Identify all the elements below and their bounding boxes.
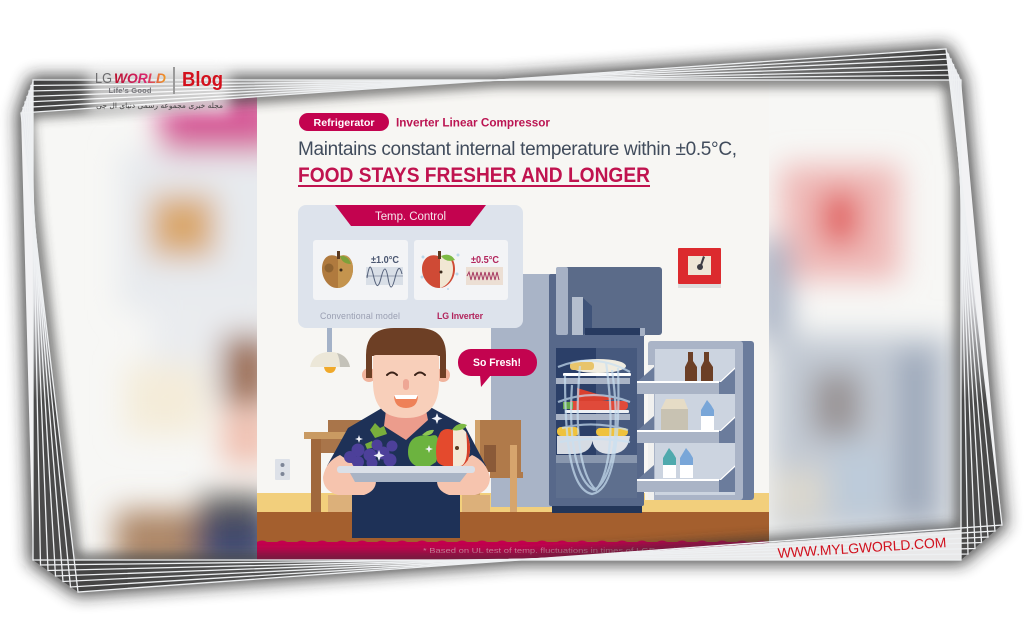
inner shadow around photo <box>25 80 961 560</box>
hair <box>366 328 446 378</box>
freezer door <box>556 267 662 336</box>
neck <box>384 410 428 440</box>
clock <box>678 248 721 288</box>
ears <box>362 368 450 382</box>
fridge <box>491 267 754 513</box>
caption: inverter: LG Inverter <box>437 311 484 321</box>
nose <box>403 379 409 390</box>
card: conventional <box>313 240 408 300</box>
grapes <box>344 423 398 468</box>
heading line one: Maintains constant internal temperature within ±0.5°C, <box>298 139 737 160</box>
red apple <box>436 424 470 467</box>
wall outlet <box>275 459 290 480</box>
shirt <box>327 408 486 538</box>
tag: Refrigerator: Refrigerator <box>314 117 374 129</box>
tagline: Life's Good <box>108 86 152 95</box>
hands <box>323 455 490 495</box>
subheading: Inverter Linear Compressor <box>396 116 550 130</box>
icon: spoiled apple <box>322 251 353 288</box>
banner: Temp. Control <box>375 211 446 223</box>
blue bottle <box>701 400 714 430</box>
heading line two: FOOD STAYS FRESHER AND LONGER <box>298 164 650 187</box>
logo backdrop haze <box>88 64 230 114</box>
speech bubble: So Fresh! <box>473 357 521 369</box>
speech bubble <box>458 349 537 387</box>
blurred photo area <box>94 97 958 560</box>
LG mark: LG <box>95 71 112 87</box>
fridge front <box>549 274 644 506</box>
food: plate <box>563 359 631 376</box>
chair <box>462 420 523 512</box>
baseboard and floor <box>257 493 769 560</box>
tag: Refrigerator <box>299 113 389 131</box>
green apple <box>408 430 439 466</box>
lamp <box>310 328 350 373</box>
bottles <box>685 352 713 381</box>
banner <box>335 205 486 226</box>
footnote: * Based on UL test of temp. fluctuations in times of LGE models RA06/C & RA06/C <box>423 546 769 555</box>
teal bottle <box>663 448 676 478</box>
icon: fresh apple <box>420 251 460 290</box>
compressed wave chart <box>466 267 503 285</box>
fridge door <box>637 341 754 500</box>
boy <box>323 328 490 538</box>
food: watermelon <box>563 388 629 413</box>
panel: main infographic <box>257 70 769 560</box>
card: inverter <box>414 240 508 300</box>
blurred right side <box>755 165 955 535</box>
wall <box>257 70 769 495</box>
WORLD wordmark: WORLD <box>114 71 166 86</box>
blue bottle two <box>680 448 693 478</box>
face <box>373 355 439 418</box>
tray <box>350 473 467 482</box>
fridge side <box>491 274 552 507</box>
tray rim <box>337 466 475 473</box>
table <box>304 420 378 512</box>
food: bowls <box>557 427 630 454</box>
fridge interior <box>556 348 637 463</box>
milk carton <box>661 399 688 431</box>
caption: conventional: Conventional model <box>320 311 400 321</box>
logo: LG World Blog <box>88 64 230 114</box>
value: ±0.5°C <box>471 254 499 266</box>
mouth <box>394 395 418 408</box>
Blog: Blog <box>182 69 223 91</box>
persian tagline: مجله خبری مجموعه رسمی دنیای ال جی <box>96 101 223 110</box>
website url: WWW.MYLGWORLD.COM <box>777 534 947 561</box>
blurred left side <box>115 90 290 570</box>
wave chart <box>366 267 403 287</box>
door shelves <box>637 367 735 492</box>
fridge base <box>552 506 642 513</box>
divider <box>173 67 175 94</box>
eyes <box>387 372 425 375</box>
sparkles <box>355 413 442 461</box>
value: ±1.0°C <box>371 254 399 266</box>
cold air swirl <box>558 361 630 494</box>
panel: temp control <box>298 205 523 328</box>
